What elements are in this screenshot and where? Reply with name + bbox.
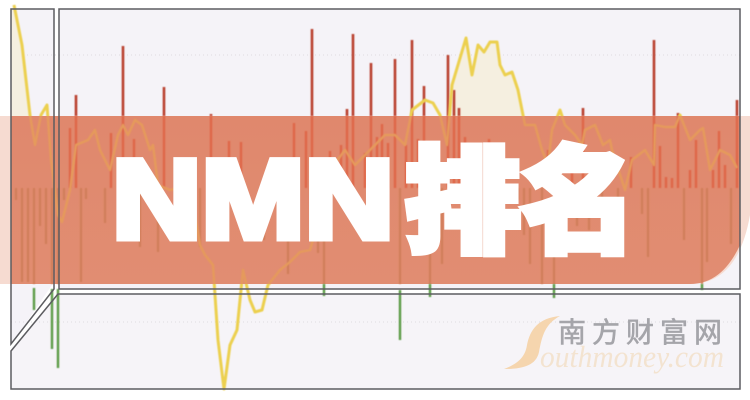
area fill under yellow line — [11, 9, 523, 116]
grid lines — [11, 55, 740, 322]
line chart: muted line inside band — [29, 116, 738, 284]
bars: green bars below band — [34, 284, 702, 368]
panel: translucent title band — [0, 116, 750, 284]
title: NMN — [112, 137, 394, 262]
bars: negative bars inside band — [16, 188, 731, 284]
panel: lower chart background — [11, 294, 740, 389]
title: 排 — [405, 138, 521, 268]
title — [112, 137, 637, 268]
icon: swoosh S — [504, 316, 560, 369]
watermark logo: Southmoney — [504, 316, 724, 374]
bars: red peaks above band — [76, 29, 737, 116]
watermark: Chinese name: 南方财富网 — [558, 317, 722, 348]
panel: main chart background — [59, 9, 740, 289]
watermark: domain: outhmoney.com — [540, 339, 724, 374]
title: 名 — [521, 138, 637, 268]
panel: left chart frame background — [11, 9, 54, 345]
bars: positive bars inside band — [70, 116, 737, 188]
